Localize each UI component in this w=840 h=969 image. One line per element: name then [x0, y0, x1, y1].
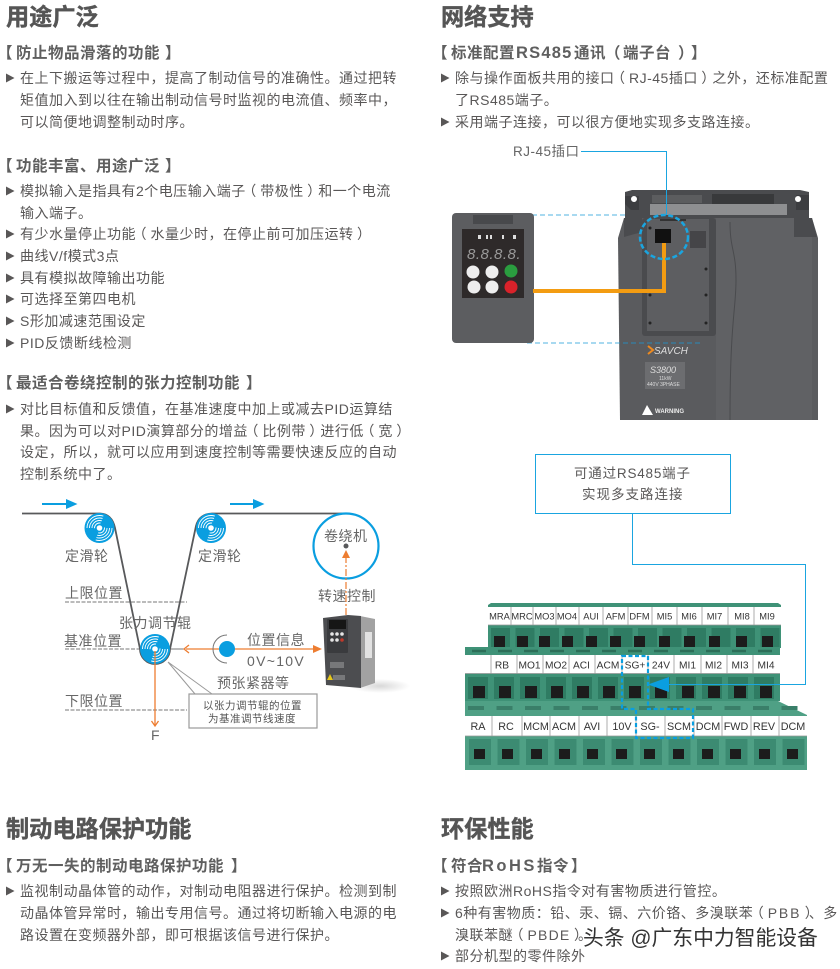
terminal row top: MI7: [707, 612, 722, 622]
text block: RS485: ）: [678, 45, 694, 62]
dashed guide lines: [516, 215, 700, 343]
terminal row middle: ACM: [597, 660, 619, 672]
terminal row top: MI6: [681, 612, 697, 622]
terminal row bottom: 10V: [612, 721, 632, 733]
terminal row middle: 24V: [652, 660, 670, 672]
terminal row bottom: MCM: [523, 721, 549, 733]
label: fixed pulley right: 定滑轮: [198, 548, 242, 564]
icon: tension roller: [140, 634, 170, 664]
terminal row middle: MI2: [705, 660, 722, 672]
arrow: belt direction right: [230, 500, 262, 508]
arrow: speed control signal: [342, 550, 350, 615]
terminal row bottom: SCM: [667, 721, 691, 733]
terminal row middle: MI3: [732, 660, 749, 672]
text block: RoHS: 】: [571, 858, 587, 875]
callout: tension roller speed note: 为基准调节线速度: [208, 712, 296, 725]
label: RJ-45 port: RJ-45插口: [513, 144, 580, 159]
panel: environmental performance: [432, 816, 838, 964]
icon: position sensor: [213, 635, 235, 663]
text block: RS485: RS485: [516, 44, 572, 62]
terminal row top: MI8: [734, 612, 750, 622]
text block: tension control: 控制系统中了。: [20, 466, 122, 482]
icon: fixed pulley right: [196, 513, 226, 543]
panel: wide application: [0, 4, 411, 482]
label: fixed pulley left: 定滑轮: [65, 548, 108, 564]
label: pre-tensioner: 预张紧器等: [217, 675, 290, 691]
text block: RS485: 通讯: [574, 44, 606, 62]
text block: anti-slip function: 在上下搬运等过程中，提高了制动信号的准确性。通过把转: [20, 70, 397, 86]
heading: brake circuit protection: 制动电路保护功能: [6, 816, 192, 842]
text block: tension control: 最适合卷绕控制的张力控制功能: [16, 373, 240, 392]
terminal row bottom: RC: [498, 721, 514, 733]
watermark: 头条 @广东中力智能设备: [583, 927, 818, 950]
highlight: RS485 terminals: [622, 656, 693, 738]
text block: RoHS: [432, 856, 838, 964]
text block: tension control: 对比目标值和反馈值，在基准速度中加上或减去PID运算结: [20, 401, 393, 417]
terminal row top: MO4: [557, 612, 577, 622]
text block: tension control: 设定，所以，就可以应用到速度控制等需要快速反应的自动: [20, 444, 397, 460]
figure: terminal block: [465, 513, 807, 770]
text block: brake protection: [0, 856, 397, 943]
text block: RS485: 】: [691, 45, 707, 62]
terminal row middle: SG+: [625, 660, 645, 672]
label: tension roller: 张力调节辊: [119, 615, 192, 631]
callout: multi-branch note: 可通过RS485端子: [574, 466, 691, 481]
inverter model plate: S3800: [650, 365, 676, 375]
terminal row bottom: RA: [470, 721, 486, 733]
text block: anti-slip function: 防止物品滑落的功能: [16, 43, 160, 62]
label: speed control: 转速控制: [318, 588, 376, 604]
terminal row top: AUI: [583, 612, 599, 622]
text block: brake protection: 监视制动晶体管的动作，对制动电阻器进行保护。检测到制: [20, 883, 397, 899]
icon: winder drum: [314, 514, 378, 578]
terminal row middle: MO2: [545, 660, 567, 672]
callout: dashed circle: [640, 215, 688, 259]
label: lower limit: 下限位置: [65, 693, 123, 709]
terminal row bottom: [465, 701, 807, 770]
text block: rich functions: 功能丰富、用途广泛: [16, 156, 160, 175]
icon: small inverter: [323, 615, 410, 693]
inverter warning: WARNING: [655, 409, 684, 415]
icon: fixed pulley left: [84, 513, 114, 543]
terminal row top: MI9: [759, 612, 775, 622]
keypad: [452, 213, 534, 343]
text block: RoHS: 6种有害物质：铅、汞、镉、六价铬、多溴联苯（PBB）、多: [455, 905, 838, 921]
terminal row middle: RB: [495, 660, 509, 672]
arrow: note to terminals: [632, 513, 806, 692]
heading: environmental performance: 环保性能: [441, 816, 534, 842]
text block: rich functions: 模拟输入是指具有2个电压输入端子（带极性）和一个电流: [20, 183, 391, 199]
heading: network support: 网络支持: [441, 4, 534, 30]
callout: tension roller speed note: [168, 662, 317, 728]
terminal row top: AFM: [606, 612, 625, 622]
text block: RS485: 采用端子连接，可以很方便地实现多支路连接。: [455, 114, 760, 130]
text block: RoHS: 溴联苯醚（PBDE）。: [455, 927, 592, 943]
text block: rich functions: PID反馈断线检测: [20, 335, 132, 351]
text block: tension control: 】: [246, 375, 262, 392]
callout: tension roller speed note: 以张力调节辊的位置: [203, 699, 302, 712]
text block: anti-slip function: [0, 43, 397, 130]
heading: wide application: 用途广泛: [6, 4, 99, 30]
label: winder: 卷绕机: [324, 528, 368, 544]
callout: multi-branch note: [536, 454, 730, 514]
terminal row top: DFM: [629, 612, 650, 622]
text block: RoHS: 部分机型的零件除外: [455, 948, 586, 964]
text block: brake protection: 路设置在变频器外部，即可根据该信号进行保护。: [20, 927, 339, 943]
callout: multi-branch note: 实现多支路连接: [582, 486, 684, 502]
terminal row bottom: DCM: [696, 721, 720, 733]
text block: brake protection: 动晶体管异常时，输出专用信号。通过将切断输入电源的电: [20, 905, 397, 921]
label: RJ-45 port: [513, 144, 666, 215]
text block: brake protection: 万无一失的制动电路保护功能: [16, 856, 224, 875]
terminal row middle: MI1: [679, 660, 696, 672]
terminal row top: MRA: [489, 612, 511, 622]
panel: brake circuit protection: [0, 816, 397, 943]
text block: RoHS: RoHS: [482, 857, 537, 875]
text block: RS485: 【: [432, 45, 448, 62]
terminal row middle: MI4: [758, 660, 775, 672]
terminal row top: [488, 603, 781, 648]
text block: rich functions: S形加减速范围设定: [20, 313, 146, 329]
belt: [22, 514, 343, 664]
text block: anti-slip function: 矩值加入到以往在输出制动信号时监视的电流值、频率中，: [20, 92, 397, 108]
text block: brake protection: 】: [231, 858, 247, 875]
label: base position: 基准位置: [64, 633, 122, 649]
text block: RS485: 除与操作面板共用的接口（RJ-45插口）之外，还标准配置: [455, 70, 828, 86]
text block: rich functions: 具有模拟故障输出功能: [20, 270, 165, 286]
text block: RoHS: 符合: [451, 856, 483, 875]
text block: rich functions: 输入端子。: [20, 205, 92, 221]
text block: RS485: [432, 43, 828, 130]
terminal row bottom: AVI: [584, 721, 600, 733]
text block: RS485: 了RS485端子。: [455, 92, 558, 108]
inverter model plate: [645, 362, 685, 389]
figure: inverter and keypad: [452, 144, 818, 420]
label: position info: 位置信息: [247, 632, 305, 648]
text block: rich functions: [0, 156, 391, 351]
text block: anti-slip function: 】: [165, 45, 181, 62]
connector: orange cable: [533, 243, 664, 291]
inverter body: [618, 190, 818, 420]
panel: network support: [432, 4, 828, 130]
terminal row bottom: SG-: [640, 721, 660, 733]
text block: RS485: 端子台: [623, 43, 671, 62]
text block: anti-slip function: 可以简便地调整制动时序。: [20, 114, 194, 130]
inverter warning: [642, 405, 684, 415]
keypad: 8.8.8.8.: [467, 246, 521, 263]
chart: tension control diagram: [22, 500, 410, 743]
text block: rich functions: 有少水量停止功能（水量少时，在停止前可加压运转）: [20, 226, 372, 242]
terminal row bottom: ACM: [552, 721, 576, 733]
text block: tension control: [0, 373, 411, 482]
inverter model plate: 440V 3PHASE: [647, 382, 680, 388]
text block: RoHS: 【: [432, 858, 448, 875]
text block: rich functions: 】: [165, 158, 181, 175]
arrow: belt direction left: [42, 500, 75, 508]
text block: RS485: 标准配置: [451, 44, 515, 62]
inverter model plate: 11kW: [659, 376, 672, 382]
text block: rich functions: 可选择至第四电机: [20, 291, 136, 307]
terminal row top: MI5: [657, 612, 672, 622]
arrow: force F: [152, 651, 158, 726]
terminal row bottom: DCM: [781, 721, 805, 733]
terminal row middle: MO1: [518, 660, 541, 672]
position dashed lines: [65, 602, 187, 710]
text block: tension control: 果。因为可以对PID演算部分的增益（比例带）进行低（宽）: [20, 423, 411, 439]
label: upper limit: 上限位置: [65, 585, 123, 601]
arrow: position signal: [184, 645, 322, 653]
text block: RS485: （: [605, 45, 621, 62]
terminal row middle: [465, 647, 780, 701]
terminal row top: MO3: [534, 612, 555, 622]
terminal row bottom: REV: [753, 721, 776, 733]
text block: RoHS: 按照欧洲RoHS指令对有害物质进行管控。: [455, 883, 726, 899]
text block: rich functions: 曲线V/f模式3点: [20, 248, 119, 264]
terminal row bottom: FWD: [724, 721, 748, 733]
label: F: F: [151, 727, 160, 743]
terminal row middle: ACI: [573, 660, 590, 672]
inverter brand: SAVCH: [654, 346, 689, 357]
terminal row top: MRC: [511, 612, 533, 622]
label: voltage range: 0V~10V: [247, 653, 305, 669]
text block: RoHS: 指令: [537, 856, 569, 875]
